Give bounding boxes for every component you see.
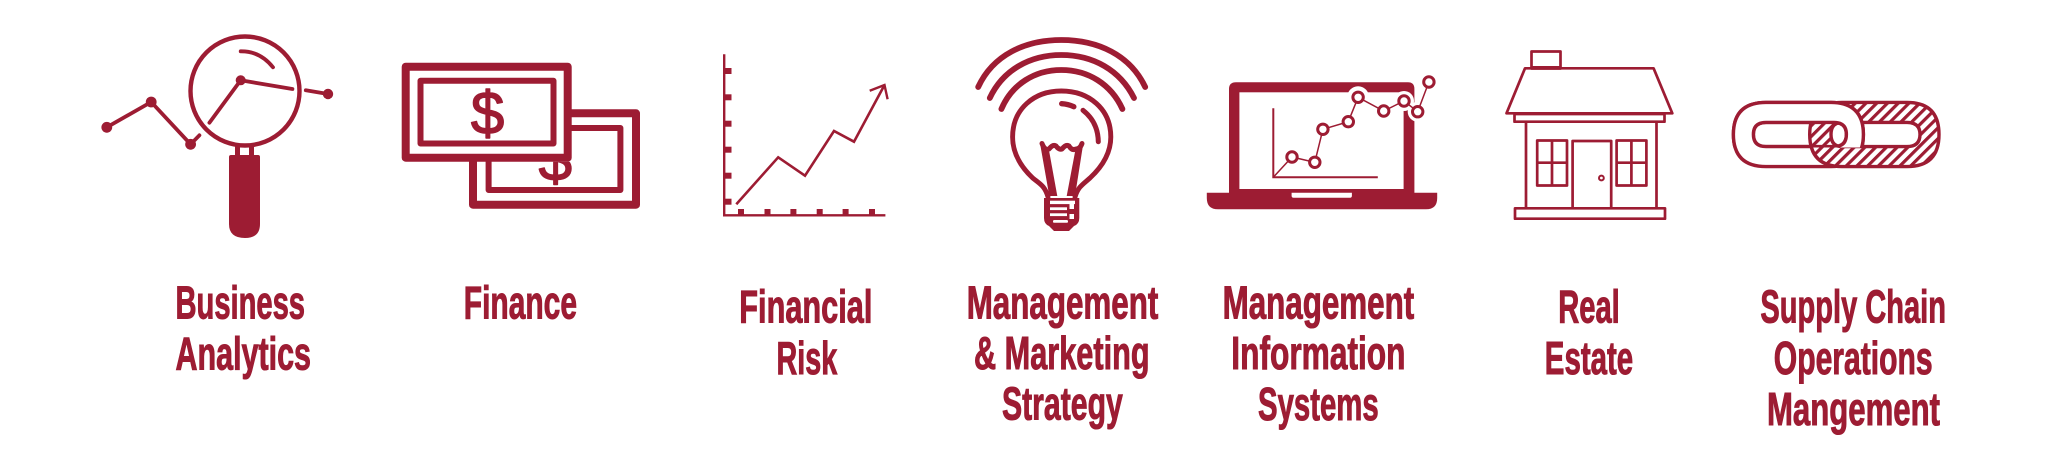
panel: Real Estate — [1506, 52, 1672, 384]
icon: banknotes: $ — [539, 126, 572, 193]
icon: banknotes — [406, 67, 636, 205]
infographic — [101, 34, 1944, 435]
label: Management Information Systems: Information — [1231, 327, 1406, 379]
label: Supply Chain Operations Mangement — [1760, 280, 1946, 435]
label: Real Estate — [1545, 280, 1633, 384]
label: Supply Chain Operations Mangement: Mangement — [1767, 383, 1940, 435]
panel: Financial Risk — [724, 54, 888, 384]
icon: banknotes: $ — [471, 80, 504, 146]
label: Management Information Systems: Systems — [1258, 378, 1379, 430]
label: Management & Marketing Strategy: & Marketing — [974, 327, 1150, 379]
label: Financial Risk — [739, 281, 872, 384]
label: Supply Chain Operations Mangement: Supply Chain — [1760, 280, 1946, 332]
icon: rising line chart — [724, 54, 888, 215]
panel: Supply Chain Operations Mangement — [1733, 102, 1946, 435]
panel: Finance — [406, 67, 636, 328]
label: Business Analytics: Analytics — [176, 327, 311, 379]
label: Management Information Systems — [1223, 276, 1414, 430]
label: Finance: Finance — [464, 276, 577, 328]
panel: Management Information Systems — [1207, 77, 1437, 430]
icon: magnifying glass over line chart — [101, 36, 333, 238]
icon: chain links — [1733, 102, 1939, 167]
label: Supply Chain Operations Mangement: Operations — [1774, 332, 1933, 384]
label: Management & Marketing Strategy: Management — [967, 276, 1158, 328]
label: Financial Risk: Risk — [776, 332, 837, 384]
panel: Business Analytics — [101, 36, 333, 379]
label: Business Analytics — [176, 276, 311, 379]
panel: Management & Marketing Strategy — [967, 40, 1158, 429]
icon: laptop with chart — [1207, 77, 1437, 209]
icon: light bulb with signal arcs — [978, 40, 1145, 231]
label: Financial Risk: Financial — [739, 281, 872, 333]
label: Real Estate: Estate — [1545, 332, 1633, 384]
icon: house — [1506, 52, 1672, 219]
label: Management Information Systems: Management — [1223, 276, 1414, 328]
label: Management & Marketing Strategy — [967, 276, 1158, 429]
label: Real Estate: Real — [1558, 280, 1620, 332]
label: Business Analytics: Business — [176, 276, 305, 328]
label: Management & Marketing Strategy: Strategy — [1002, 377, 1123, 429]
